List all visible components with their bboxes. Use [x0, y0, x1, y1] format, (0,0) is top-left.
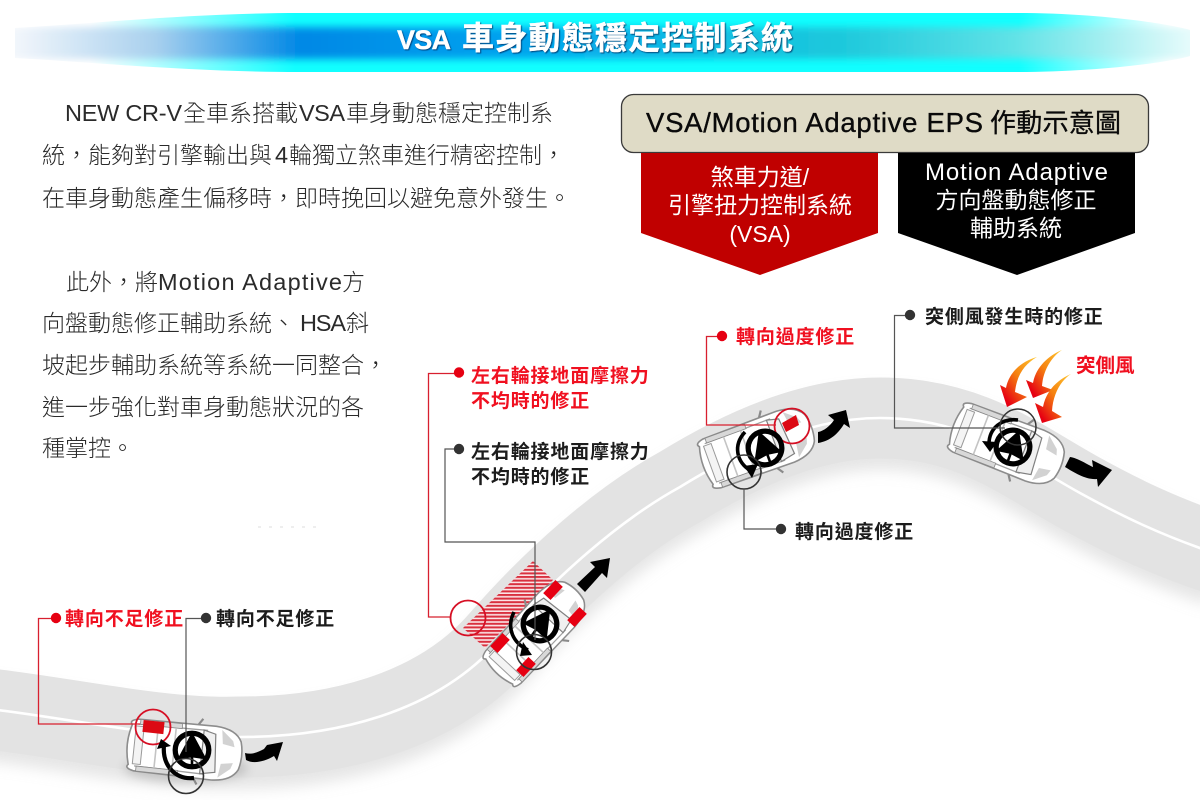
oversteer black label: [744, 489, 914, 543]
leaders and labels: understeer: [38, 608, 184, 724]
grey circle: [516, 634, 552, 670]
intro paragraph 2: 進一步強化對車身動態狀況的各: [42, 388, 364, 422]
road: [0, 418, 1200, 749]
VSA red pentagon: (VSA): [729, 221, 791, 247]
friction leader black: 不均時的修正: [471, 466, 590, 488]
intro paragraph 2: 向盤動態修正輔助系統、: [42, 304, 295, 338]
oversteer red label: [706, 325, 855, 425]
intro paragraph 1: 4: [275, 142, 288, 168]
diagram header box: 作動示意圖: [990, 108, 1121, 138]
intro paragraph 1: 車身動態穩定控制系: [346, 94, 553, 128]
black understeer label: [186, 608, 335, 752]
rotation arrow: [511, 612, 532, 656]
VSA red pentagon: 煞車力道/: [711, 164, 810, 190]
intro paragraph 1: 統，能夠對引擎輸出與: [42, 136, 272, 170]
red circle: [774, 408, 810, 444]
rotation arrow: [157, 739, 194, 778]
diagram header box: [622, 94, 1148, 152]
car 2: split friction: [475, 558, 610, 694]
VSA red pentagon: [641, 153, 878, 275]
brake marker: [782, 415, 799, 432]
title: VSA: [397, 25, 451, 55]
Motion Adaptive black pentagon: Motion Adaptive: [925, 159, 1108, 186]
intro paragraph 2: 此外，將: [66, 263, 158, 297]
steering wheel: [175, 732, 209, 767]
Motion Adaptive black pentagon: 方向盤動態修正: [936, 187, 1096, 213]
intro paragraph 2: Motion Adaptive: [158, 269, 342, 295]
rotation arrow: [738, 432, 758, 478]
intro paragraph 2: [42, 263, 387, 463]
red circle: [450, 600, 486, 636]
friction leader black: [445, 440, 650, 640]
grey circle: [168, 758, 204, 794]
motion arrow: [1065, 457, 1112, 487]
intro paragraph 1: 輪獨立煞車進行精密控制，: [289, 136, 565, 170]
intro paragraph 2: 種掌控。: [42, 429, 134, 463]
intro paragraph 1: VSA: [299, 100, 345, 126]
intro paragraph 2: 斜: [346, 304, 369, 338]
friction leader red: 不均時的修正: [471, 390, 590, 412]
brake markers: [490, 580, 587, 677]
red brake marker: [142, 720, 165, 734]
motion arrow: [818, 410, 850, 443]
faint dots: [258, 526, 316, 528]
crosswind red label: 突側風: [1076, 354, 1135, 377]
friction leader black: 左右輪接地面摩擦力: [471, 440, 650, 463]
crosswind label: [894, 305, 1104, 428]
motion arrow: [577, 558, 610, 592]
friction hatch: [463, 561, 553, 648]
grey circle: [1000, 409, 1036, 445]
intro paragraph 2: HSA: [300, 310, 346, 336]
title: 車身動態穩定控制系統: [462, 20, 793, 56]
steering wheel: [517, 600, 564, 647]
friction leader red: 左右輪接地面摩擦力: [471, 364, 650, 387]
grey circle: [727, 455, 761, 489]
car 3: oversteer: [692, 396, 850, 498]
intro paragraph 2: 方: [342, 263, 365, 297]
oversteer black label: 轉向過度修正: [795, 520, 914, 543]
motion arrow: [245, 742, 283, 762]
intro paragraph 1: 全車系搭載: [183, 94, 298, 128]
steering wheel: [991, 424, 1035, 469]
friction leader red: [428, 364, 650, 636]
intro paragraph 1: [42, 94, 571, 213]
black understeer label: 轉向不足修正: [216, 608, 335, 630]
intro paragraph 2: 坡起步輔助系統等系統一同整合，: [42, 346, 387, 380]
VSA red pentagon: 引擎扭力控制系統: [668, 192, 852, 218]
diagram header box: VSA/Motion Adaptive EPS: [646, 107, 983, 138]
intro paragraph 1: 在車身動態產生偏移時，即時挽回以避免意外發生。: [42, 179, 571, 213]
oversteer red label: 轉向過度修正: [736, 325, 855, 348]
crosswind label: 突側風發生時的修正: [925, 305, 1104, 328]
Motion Adaptive black pentagon: 輔助系統: [970, 215, 1062, 241]
intro paragraph 1: NEW CR-V: [65, 100, 182, 126]
Motion Adaptive black pentagon: [898, 153, 1135, 275]
car 4: crosswind: [942, 394, 1112, 497]
title banner: [0, 13, 1200, 72]
leaders and labels: understeer: 轉向不足修正: [65, 608, 184, 630]
red circle: [136, 710, 170, 744]
car 1: understeer: [124, 710, 283, 794]
rotation arrow: [982, 420, 1018, 452]
icon: wind arrows: [1000, 350, 1071, 423]
steering wheel: [743, 425, 787, 470]
